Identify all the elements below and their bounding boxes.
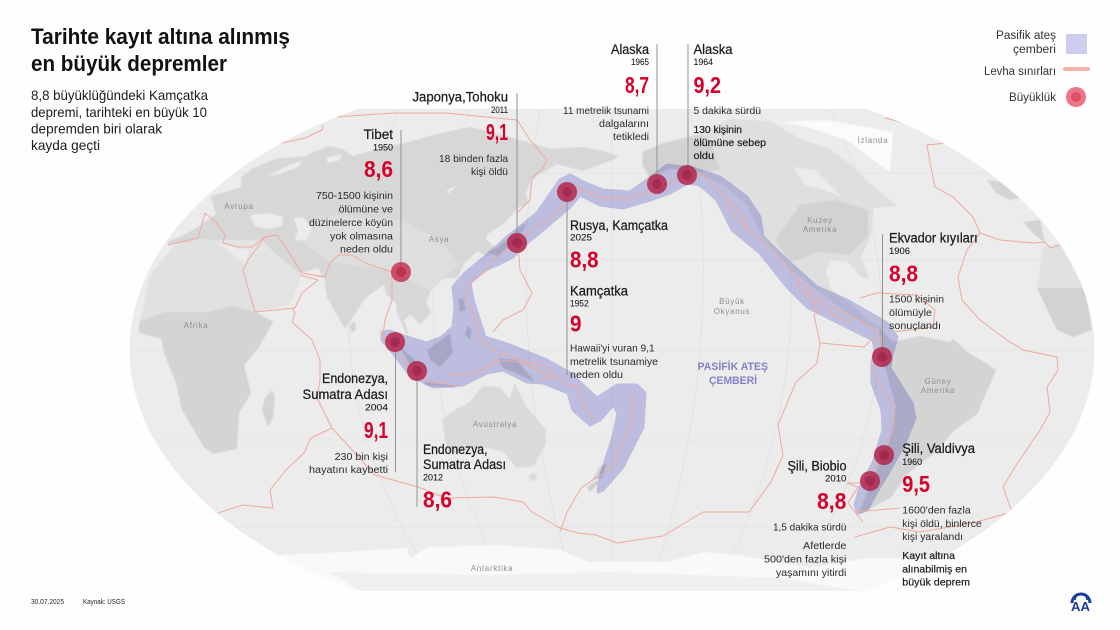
legend (984, 30, 1088, 107)
land: Sri Lanka (350, 322, 356, 332)
annotation: Alaska 1964: oldu (694, 150, 714, 162)
ring of fire label: PASİFİK ATEŞ (698, 360, 768, 373)
annotation: Ekvador kıyıları (889, 231, 978, 332)
map labels: Afrika (184, 321, 208, 330)
map labels: Avustralya (473, 420, 517, 429)
legend: Büyüklük (1009, 92, 1056, 104)
annotation: Japonya Tohoku: kişi öldü (471, 166, 508, 178)
map labels: Okyanus (714, 307, 750, 316)
legend: çemberi (1013, 44, 1056, 56)
Greenland (780, 120, 893, 172)
seas in Eurasia (250, 154, 458, 278)
magnitude dots (385, 165, 894, 491)
annotation: Kamçatka 1952: neden oldu (570, 369, 623, 381)
land: Australia (443, 385, 545, 467)
annotation: Şili Biobio: Şili, Biobio (788, 459, 846, 474)
annotation: Alaska 1964: Alaska (694, 42, 733, 57)
annotation: Tibet: Tibet (364, 127, 393, 142)
annotation: Şili Valdivya: alınabilmiş en (902, 563, 967, 575)
annotation: Tibet: neden oldu (340, 244, 393, 256)
land: Arabia (246, 254, 300, 311)
annotation: Alaska 1965: 8,7 (625, 72, 649, 98)
annotation: Alaska 1964: 1964 (694, 57, 713, 68)
annotation: Şili Biobio: 1,5 dakika sürdü (773, 522, 847, 534)
annotation: Kamçatka 1952: metrelik tsunamiye (570, 356, 658, 368)
annotation: Şili Biobio (764, 459, 847, 579)
map labels: Antarktika (471, 564, 513, 573)
annotation: Endonezya 2012: 2012 (423, 473, 443, 484)
annotation: Endonezya 2004: 2004 (365, 403, 388, 414)
annotation: Kamçatka 1952 (570, 284, 658, 381)
annotation: Şili Valdivya: büyük deprem (902, 577, 970, 589)
annotation: Endonezya 2012: 8,6 (423, 487, 452, 513)
ring of fire label (698, 360, 768, 387)
annotation: Alaska 1965: 11 metrelik tsunami (563, 105, 649, 117)
annotation: Kamçatka 1952: 9 (570, 311, 582, 337)
annotation: Şili Valdivya: 1600'den fazla (902, 505, 971, 517)
annotation: Ekvador kıyıları: 8,8 (889, 261, 918, 287)
annotation: Tibet: 8,6 (364, 156, 393, 182)
annotation: Şili Valdivya: 1960 (902, 457, 922, 468)
annotation: Tibet: 1950 (373, 143, 393, 154)
annotation: Şili Biobio: 8,8 (817, 488, 847, 514)
annotation: Japonya Tohoku: 2011 (491, 105, 508, 116)
title: en büyük depremler (31, 51, 227, 76)
Antarctica (260, 545, 970, 600)
annotation: Japonya Tohoku: 18 binden fazla (439, 153, 508, 165)
annotation: Alaska 1964: 5 dakika sürdü (694, 105, 761, 117)
annotation: Kamçatka 1952: Hawaii'yi vuran 9,1 (570, 343, 655, 355)
map labels: Avrupa (224, 202, 254, 211)
annotation: Rusya Kamçatka 2025: 2025 (570, 233, 592, 244)
legend: Levha sınırları (984, 66, 1056, 78)
annotation: Alaska 1965 (563, 42, 649, 143)
annotation: Rusya Kamçatka 2025 (570, 218, 668, 273)
annotation: Şili Valdivya: 9,5 (902, 471, 930, 497)
annotation: Tibet: düzinelerce köyün (309, 217, 393, 229)
title (31, 24, 290, 76)
legend: Pasifik ateş (996, 30, 1056, 42)
land: Africa (140, 239, 254, 320)
annotation: Endonezya 2004: Sumatra Adası (302, 387, 388, 402)
title: Tarihte kayıt altına alınmış (31, 24, 290, 49)
icon: AA logo: AA (1071, 599, 1091, 614)
world map (120, 100, 1110, 600)
annotation: Ekvador kıyıları: ölümüyle (889, 307, 932, 319)
ring of fire label: ÇEMBERİ (709, 374, 757, 387)
annotation: Japonya Tohoku: Japonya,Tohoku (412, 90, 508, 104)
annotation: Ekvador kıyıları: Ekvador kıyıları (889, 231, 978, 246)
annotation: Endonezya 2012: Endonezya, (423, 442, 488, 457)
annotation: Şili Valdivya: kişi yaralandı (902, 531, 963, 543)
subtitle: depremi, tarihteki en büyük 10 (31, 104, 207, 120)
annotation: Alaska 1965: dalgalarını (599, 118, 649, 130)
Pacific Ring of Fire (382, 165, 915, 513)
annotation: Şili Valdivya: Kayıt altına (902, 550, 955, 562)
annotation: Ekvador kıyıları: sonuçlandı (889, 320, 941, 332)
land: South America (860, 330, 995, 513)
map labels: Büyük (719, 297, 745, 306)
annotation: Endonezya 2012 (423, 442, 506, 513)
annotation: Japonya Tohoku (412, 90, 508, 178)
annotation: Tibet: 750-1500 kişinin (316, 190, 393, 202)
subtitle (31, 87, 208, 153)
annotation: Tibet (309, 127, 393, 256)
annotation: Rusya Kamçatka 2025: Rusya, Kamçatka (570, 218, 668, 233)
annotation: Alaska 1965: tetikledi (613, 131, 649, 143)
annotation: Endonezya 2004: hayatını kaybetti (309, 464, 388, 476)
map labels: İzlanda (858, 136, 888, 145)
map labels: Kuzey (807, 216, 833, 225)
annotation: Şili Valdivya (902, 441, 982, 589)
leader lines (396, 44, 882, 507)
annotation: Alaska 1964: 130 kişinin (694, 124, 742, 136)
annotation: Şili Biobio: yaşamını yitirdi (776, 567, 846, 579)
land: islands (398, 223, 607, 492)
annotation: Ekvador kıyıları: 1906 (889, 246, 910, 257)
annotation: Endonezya 2012: Sumatra Adası (423, 457, 506, 472)
map labels: Güney (924, 377, 952, 386)
annotation: Şili Biobio: 500'den fazla kişi (764, 554, 846, 566)
subtitle: kayda geçti (31, 137, 100, 153)
annotation: Endonezya 2004: 230 bin kişi (335, 451, 388, 463)
annotation: Şili Valdivya: kişi öldü, binlerce (902, 518, 982, 530)
annotation: Alaska 1964: 9,2 (694, 72, 721, 98)
annotation: Rusya Kamçatka 2025: 8,8 (570, 247, 599, 273)
annotation: Alaska 1965: Alaska (611, 42, 649, 57)
map labels: Amerika (803, 225, 837, 234)
annotation: Tibet: ölümüne ve (339, 204, 393, 216)
footer date and source (31, 597, 125, 606)
footer date and source: 30.07.2025 (31, 597, 64, 606)
annotation: Kamçatka 1952: 1952 (570, 299, 589, 310)
subtitle: 8,8 büyüklüğündeki Kamçatka (31, 87, 208, 103)
land: Madagascar (262, 390, 275, 427)
annotation: Tibet: yok olmasına (330, 230, 393, 242)
land: Britain (987, 180, 1020, 200)
footer date and source: Kaynak: USGS (83, 597, 125, 606)
map labels: Asya (429, 235, 449, 244)
annotation: Kamçatka 1952: Kamçatka (570, 284, 628, 299)
land: West Africa edge (1038, 244, 1082, 288)
land: North America (643, 120, 895, 328)
annotation: Japonya Tohoku: 9,1 (486, 119, 508, 145)
annotation: Endonezya 2004 (302, 371, 388, 476)
annotation: Alaska 1964 (694, 42, 766, 162)
subtitle: depremden biri olarak (31, 120, 163, 136)
Hudson Bay (794, 168, 840, 196)
land: Eurasia (168, 128, 617, 333)
annotation: Ekvador kıyıları: 1500 kişinin (889, 294, 944, 306)
map labels (184, 136, 955, 573)
annotation: Endonezya 2004: Endonezya, (322, 371, 388, 386)
annotation: Şili Biobio: Afetlerde (803, 540, 847, 552)
annotation: Alaska 1964: ölümüne sebep (694, 137, 766, 149)
annotation: Şili Biobio: 2010 (825, 474, 846, 485)
plate boundaries (168, 113, 1060, 543)
map labels: Amerika (921, 386, 955, 395)
annotation: Endonezya 2004: 9,1 (364, 417, 388, 443)
annotation: Şili Valdivya: Şili, Valdivya (902, 441, 975, 456)
annotation: Alaska 1965: 1965 (631, 57, 649, 68)
